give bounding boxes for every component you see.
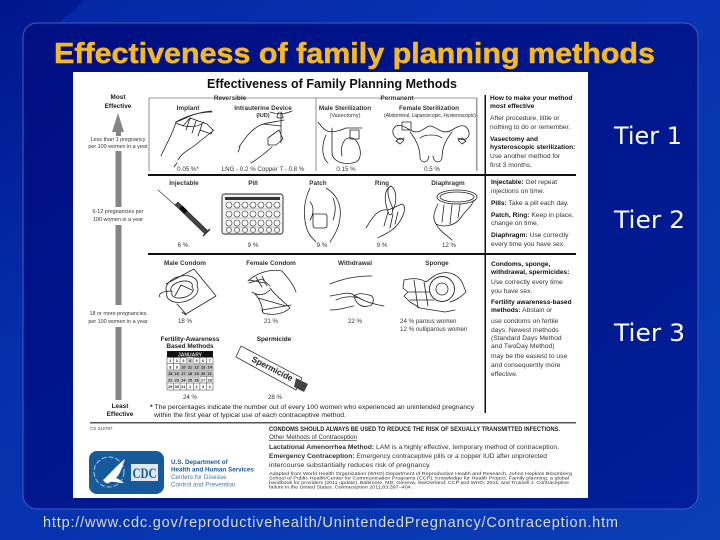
icon: fertility calendar: 29 [168, 385, 172, 389]
effectiveness tips: and consequently more [491, 362, 561, 369]
icon: fertility calendar: 13 [201, 366, 205, 370]
effectiveness scale arrow: Effective [107, 411, 134, 418]
icon: sponge in hand [403, 273, 466, 312]
effectiveness scale arrow [88, 94, 148, 418]
icon: fertility calendar: 23 [175, 378, 179, 382]
tier 2 methods: 9 % [377, 242, 388, 249]
footnote: * The percentages indicate the number out of every 100 women who experienced an unintended pregnancy [150, 404, 475, 411]
notes on condoms and other methods: failure in the United States. Contraception 2011;83:397–404. [269, 484, 412, 490]
tier 3 methods: 24 % parous women [400, 318, 457, 325]
tier 2 methods: 12 % [442, 242, 457, 249]
icon: fertility calendar: 25 [188, 378, 192, 382]
effectiveness scale arrow: Least [112, 403, 129, 410]
tier 2 methods: Injectable [169, 180, 199, 187]
HHS and CDC wordmark: Control and Prevention [171, 482, 236, 488]
effectiveness tips: Diaphragm: Use correctly [491, 232, 569, 239]
icon: ring in hand [366, 186, 405, 238]
notes on condoms and other methods: Lactational Amenorrhea Method: LAM is a highly effective, temporary method of contraception. [269, 444, 559, 451]
icon: fertility calendar [167, 351, 213, 390]
tier 2 methods: Patch [309, 180, 327, 187]
effectiveness tips: days. Newest methods [491, 327, 559, 334]
icon: uterus and tubes [393, 122, 469, 162]
effectiveness tips: Patch, Ring: Keep in place, [491, 212, 574, 219]
effectiveness tips: use condoms on fertile [491, 318, 559, 325]
icon: fertility calendar: 8 [169, 366, 171, 370]
effectiveness tips: injections on time. [491, 188, 545, 195]
table rules [90, 95, 576, 424]
tier 3 label: Tier 3 [613, 319, 685, 347]
tier 1 methods: (Vasectomy) [330, 113, 361, 119]
HHS and CDC wordmark: U.S. Department of [171, 459, 229, 466]
effectiveness tips: every time you have sex. [491, 241, 565, 248]
effectiveness tips: (Standard Days Method [491, 335, 562, 342]
tier 1 methods: Reversible [214, 95, 247, 102]
icon: fertility calendar: 22 [168, 378, 172, 382]
effectiveness tips: nothing to do or remember. [490, 124, 570, 131]
tier 3 methods: Spermicide [257, 336, 292, 343]
effectiveness tips: hysteroscopic sterilization: [490, 144, 575, 151]
tier 3 methods: Male Condom [164, 260, 206, 267]
icon: implant in arm [161, 111, 214, 167]
effectiveness scale arrow: per 100 women in a year [88, 144, 148, 150]
icon: vasectomy [318, 122, 362, 164]
footnote: within the first year of typical use of each contraceptive method. [153, 412, 346, 419]
effectiveness tips: change on time. [491, 220, 539, 227]
icon: fertility calendar: 6 [202, 359, 204, 363]
tier 1 methods: 0.05 %* [177, 166, 199, 173]
effectiveness tips: may be the easiest to use [491, 353, 567, 360]
notes on condoms and other methods: handbook for providers (2011 update). Baltimore, MD; Geneva, Switzerland: CCP and WHO; 2011; and Trussell J. Contraceptive [269, 480, 570, 485]
effectiveness scale arrow: per 100 women in a year [88, 319, 148, 325]
notes on condoms and other methods [269, 426, 573, 490]
icon: fertility calendar: 14 [208, 366, 213, 370]
effectiveness tips: Use correctly every time [491, 279, 563, 286]
effectiveness tips: methods: Abstain or [491, 307, 553, 314]
footnote [90, 404, 475, 431]
icon: fertility calendar: 10 [181, 366, 186, 370]
icon: fertility calendar: 31 [181, 385, 186, 389]
icon: fertility calendar: 19 [194, 372, 199, 376]
tier 1 methods: Permanent [380, 95, 414, 102]
tier 1 methods: 0.15 % [336, 166, 356, 173]
tier 1 methods: 0.5 % [424, 166, 440, 173]
tier 2 methods: Diaphragm [431, 180, 465, 187]
effectiveness tips: effective. [491, 371, 518, 378]
effectiveness tips: Vasectomy and [490, 136, 538, 143]
effectiveness scale arrow: Most [111, 94, 126, 101]
tier 1 methods: Intrauterine Device [234, 105, 292, 112]
icon: fertility calendar: 7 [209, 359, 211, 363]
tier 2 methods: 6 % [178, 242, 189, 249]
icon: patch on arm [304, 188, 340, 242]
panel: CDC chart image [73, 72, 588, 498]
source url: http://www.cdc.gov/reproductivehealth/UnintendedPregnancy/Contraception.htm [43, 515, 618, 531]
tier 3 methods: 21 % [264, 318, 279, 325]
effectiveness tips: Fertility awareness-based [491, 299, 572, 306]
icon: fertility calendar: 24 [181, 378, 186, 382]
effectiveness tips: Injectable: Get repeat [491, 179, 557, 186]
icon: fertility calendar: 9 [176, 366, 178, 370]
icon: pill pack [222, 194, 283, 234]
icon: spermicide tube: Spermicide [250, 354, 295, 383]
icon: fertility calendar: 20 [201, 372, 205, 376]
notes on condoms and other methods: intercourse substantially reduces risk of pregnancy. [269, 462, 431, 469]
notes on condoms and other methods: CONDOMS SHOULD ALWAYS BE USED TO REDUCE THE RISK OF SEXUALLY TRANSMITTED INFECTIONS. [269, 426, 560, 433]
icon: fertility calendar: 4 [189, 359, 192, 363]
notes on condoms and other methods: Other Methods of Contraception [269, 434, 358, 441]
notes on condoms and other methods: Emergency Contraception: Emergency contraceptive pills or a copper IUD after unprotected [269, 453, 548, 460]
effectiveness tips: Use another method for [490, 153, 561, 160]
tier 3 methods: Sponge [425, 260, 449, 267]
tier 3 methods: 28 % [268, 394, 283, 401]
tier 3 methods [160, 260, 468, 401]
effectiveness tips: Condoms, sponge, [491, 261, 551, 268]
tier 1 methods: (IUD) [256, 113, 270, 119]
icon: intrauterine device [238, 111, 292, 163]
tier 1 methods: Female Sterilization [399, 105, 459, 112]
effectiveness scale arrow: 100 women in a year [93, 217, 143, 223]
tier 1 label: Tier 1 [613, 122, 682, 150]
effectiveness scale arrow: 6-12 pregnancies per [93, 209, 144, 215]
tier 1 methods: Implant [177, 105, 200, 112]
icon: fertility calendar: 5 [196, 359, 198, 363]
effectiveness scale arrow: 18 or more pregnancies [90, 311, 147, 317]
tier 3 methods: 12 % nulliparous women [400, 326, 468, 333]
tier 1 methods: LNG - 0.2 % Copper T - 0.8 % [222, 166, 305, 173]
icon: spermicide tube [236, 346, 308, 392]
tier 2 methods: 9 % [248, 242, 259, 249]
effectiveness tips: How to make your method [490, 95, 572, 102]
tier 3 methods: 18 % [178, 318, 193, 325]
icon: fertility calendar: 21 [208, 372, 212, 376]
icon: HHS and CDC logo [89, 451, 164, 494]
tier 3 methods: Withdrawal [338, 260, 372, 267]
effectiveness tips: and TwoDay Method) [491, 343, 554, 350]
tier 2 methods [158, 180, 477, 249]
icon: male condom packet [160, 269, 216, 315]
icon: female condom in hand [248, 270, 296, 314]
effectiveness tips: first 3 months. [490, 162, 532, 169]
icon: fertility calendar: 26 [194, 378, 199, 382]
chart heading: Effectiveness of Family Planning Methods [207, 77, 457, 91]
tier 3 methods: Female Condom [246, 260, 296, 267]
icon: syringe [158, 190, 210, 236]
tier 1 methods: Male Sterilization [319, 105, 371, 112]
icon: fertility calendar: 30 [175, 385, 179, 389]
icon: fertility calendar: 17 [181, 372, 186, 376]
icon: fertility calendar: 1 [189, 385, 191, 389]
tier 2 label: Tier 2 [613, 206, 685, 234]
icon: fertility calendar: JANUARY [178, 352, 203, 358]
effectiveness tips: Pills: Take a pill each day. [491, 200, 569, 207]
footnote: CS 242797 [90, 426, 113, 431]
icon: fertility calendar: 4 [209, 385, 212, 389]
notes on condoms and other methods: School of Public Health/Center for Communication Programs (CCP), Knowledge for Health Project. Family planning: a global [269, 476, 569, 480]
icon: fertility calendar: 12 [194, 366, 199, 370]
icon: fertility calendar: 27 [201, 378, 205, 382]
icon: fertility calendar: 2 [176, 359, 178, 363]
notes on condoms and other methods: Adapted from World Health Organization (WHO) Department of Reproductive Health and Research, Johns Hopkins Bloomberg [269, 471, 573, 476]
icon: withdrawal [330, 276, 384, 310]
icon: fertility calendar: 11 [188, 366, 192, 370]
tier 2 methods: Ring [375, 180, 389, 187]
HHS and CDC wordmark: Health and Human Services [171, 466, 254, 474]
icon: fertility calendar: 2 [196, 385, 198, 389]
HHS and CDC wordmark [171, 459, 254, 488]
HHS and CDC wordmark: Centers for Disease [171, 474, 227, 481]
icon: fertility calendar: 18 [188, 372, 192, 376]
tier 2 methods: Pill [248, 180, 258, 187]
tier 2 methods: 9 % [317, 242, 328, 249]
icon: fertility calendar: 3 [202, 385, 204, 389]
tier 3 methods: 24 % [183, 394, 198, 401]
icon: diaphragm in hand [434, 190, 477, 240]
tier 1 methods: (Abdominal, Laparoscopic, Hysteroscopic) [384, 113, 476, 119]
effectiveness scale arrow: Effective [105, 103, 132, 110]
icon: fertility calendar: 15 [168, 372, 172, 376]
tier 1 methods [161, 95, 476, 173]
effectiveness tips: After procedure, little or [490, 115, 560, 122]
tier 3 methods: 22 % [348, 318, 363, 325]
effectiveness tips: you have sex. [491, 288, 532, 295]
effectiveness tips [490, 95, 575, 378]
icon: fertility calendar: 16 [175, 372, 179, 376]
effectiveness tips: most effective [490, 103, 535, 110]
effectiveness tips: withdrawal, spermicides: [490, 269, 569, 276]
tier 3 methods: Based Methods [166, 343, 214, 350]
tier 3 methods: Fertility-Awareness [161, 336, 220, 343]
title: Effectiveness of family planning methods [54, 38, 655, 70]
icon: HHS and CDC logo: CDC [132, 466, 156, 482]
icon: fertility calendar: 1 [169, 359, 171, 363]
icon: fertility calendar: 28 [208, 378, 212, 382]
icon: fertility calendar: 3 [182, 359, 184, 363]
effectiveness scale arrow: Less than 1 pregnancy [91, 137, 146, 143]
